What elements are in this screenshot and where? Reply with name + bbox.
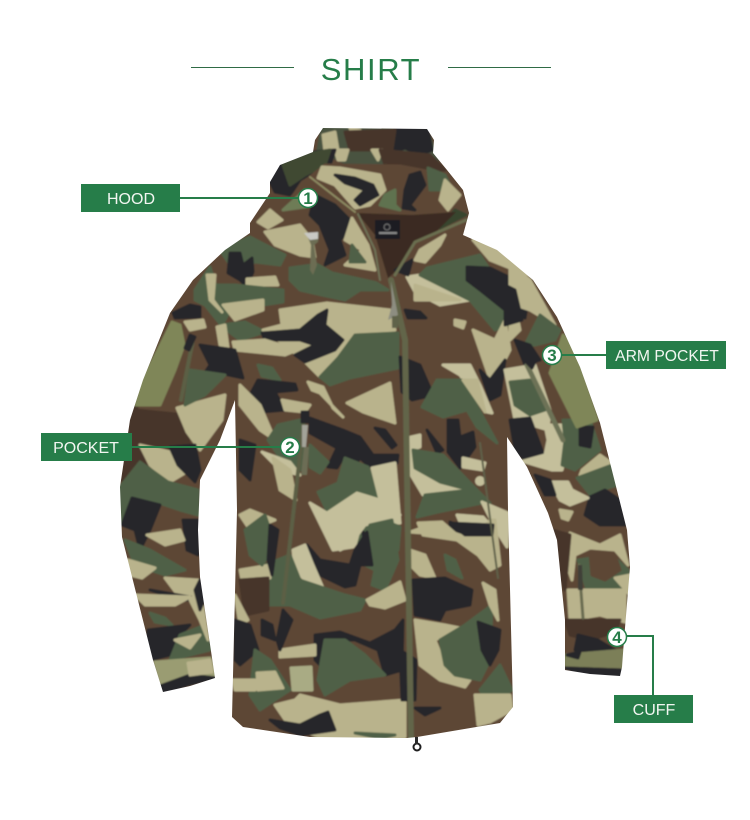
jacket illustration: [120, 128, 630, 738]
zipper pull: [414, 744, 420, 750]
callout: arm pocket: [542, 341, 726, 369]
title: SHIRT: [321, 52, 421, 87]
main zipper: [388, 280, 411, 738]
callout: hood: 1: [303, 189, 313, 208]
callout: cuff: CUFF: [633, 702, 676, 719]
arm pockets: [181, 335, 563, 440]
hood front panel: [310, 162, 427, 176]
callout: pocket: POCKET: [53, 440, 119, 457]
velcro patch: right arm: [550, 335, 597, 427]
right cuff: [565, 650, 625, 677]
left side hood: [250, 193, 290, 233]
callout: cuff: 4: [612, 628, 622, 647]
hood: [250, 128, 468, 280]
callout: hood: [81, 184, 318, 212]
chest and hip pocket zippers: [283, 412, 583, 618]
panel: right body camouflage: [400, 240, 530, 725]
callout: arm pocket: ARM POCKET: [615, 348, 719, 365]
callout: arm pocket: 3: [547, 346, 557, 365]
panel: right sleeve camouflage: [505, 265, 630, 652]
hood lining: [357, 212, 456, 278]
callout: pocket: 2: [285, 438, 295, 457]
right collar: [404, 216, 466, 262]
callout: pocket: [41, 433, 300, 461]
left collar flap: [318, 208, 373, 280]
left cuff: [155, 658, 216, 693]
panel: left sleeve camouflage: [120, 267, 225, 660]
panel: main body camouflage: [185, 237, 405, 738]
hood label: [375, 220, 400, 239]
callout: cuff: [608, 628, 693, 723]
velcro patch: left arm: [136, 322, 184, 405]
hood drawcord puller: [304, 232, 319, 275]
callout: hood: HOOD: [107, 191, 155, 208]
